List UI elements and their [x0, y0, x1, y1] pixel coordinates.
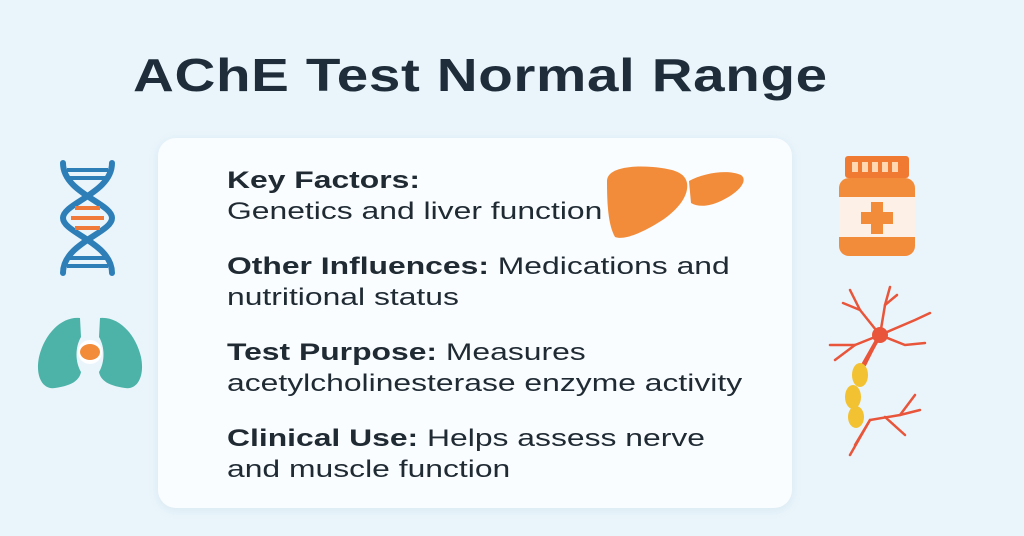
icon: neuron	[828, 286, 932, 456]
icon: lungs	[38, 318, 142, 388]
icon: medicine bottle	[839, 156, 915, 256]
text: other influences	[227, 253, 730, 310]
text: clinical use	[227, 425, 705, 482]
text: test purpose	[227, 339, 742, 396]
icon: liver	[607, 166, 744, 238]
text: key factors: Genetics and liver function	[227, 198, 602, 224]
text: test purpose: acetylcholinesterase enzyme activity	[227, 370, 742, 396]
text: clinical use: and muscle function	[227, 456, 510, 482]
panel: info card	[158, 138, 792, 508]
title: AChE Test Normal Range	[133, 49, 828, 101]
text: key factors	[227, 167, 602, 224]
text: clinical use: Clinical Use: Helps assess nerve	[227, 425, 705, 452]
icon: dna	[60, 160, 115, 276]
text: other influences: Other Influences: Medications and	[227, 253, 730, 280]
text: other influences: nutritional status	[227, 284, 459, 310]
text: test purpose: Test Purpose: Measures	[227, 339, 586, 366]
text: key factors: Key Factors:	[227, 167, 420, 194]
